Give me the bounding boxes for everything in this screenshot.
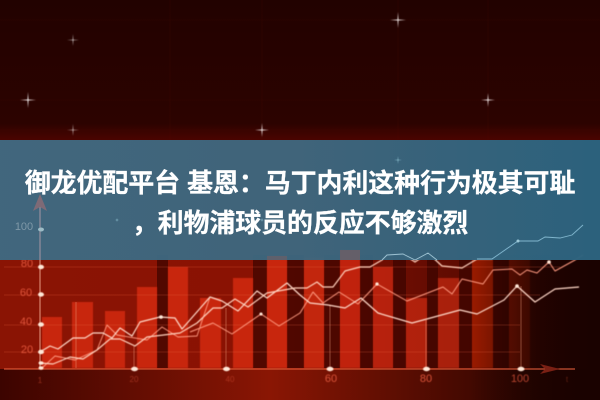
x axis labels: 100 [511,373,529,385]
right side fade to dark [470,255,600,400]
faded axis in band [39,205,41,260]
x axis labels: 1 [38,376,43,385]
x axis labels: 60 [325,373,337,385]
y axis labels [20,258,33,356]
star 1 [67,34,79,46]
y axis labels: 40 [20,316,32,328]
y axis labels: 80 [21,258,33,270]
faded axis marker [38,228,44,232]
dark gaps between bars [157,255,509,368]
line D [190,255,583,334]
floor under the axis [0,369,600,400]
star 2 [20,92,36,108]
sky [0,0,600,140]
line A [40,283,579,352]
title [24,168,575,238]
teal title band [0,140,600,260]
data point and axis markers [38,260,551,371]
star 5 [390,12,406,28]
star 6 [481,93,495,107]
bar series [42,250,530,368]
y axis with arrow [33,194,47,368]
title: ，利物浦球员的反应不够激烈 [132,208,468,238]
x axis labels: 20 [130,375,139,384]
lower chart backdrop [0,140,600,370]
x axis with arrow [4,364,575,374]
stars [20,12,495,137]
horizontal grid lines [4,267,560,352]
thin line [42,297,210,368]
faded arrow head [33,194,47,211]
star 3 [67,124,79,136]
y axis labels: 20 [21,344,33,356]
faded line trace [382,253,437,260]
faint grid in the sky [0,0,600,140]
faded right line trace [477,225,583,259]
faded bar tops in band [340,250,360,260]
x axis labels: t [566,375,569,384]
faded label 100: 100 [15,221,33,233]
x axis labels: 80 [420,373,432,385]
line series [40,225,583,368]
faded marker [516,240,520,242]
x axis labels [38,373,569,385]
y axis labels: 60 [20,287,32,299]
x axis labels: 40 [226,375,235,384]
star 4 [255,123,269,137]
line B [40,225,583,364]
drop lines from data points to axis [76,286,521,368]
faint stars in band [115,156,402,222]
title: 御龙优配平台 基恩：马丁内利这种行为极其可耻 [25,168,575,198]
